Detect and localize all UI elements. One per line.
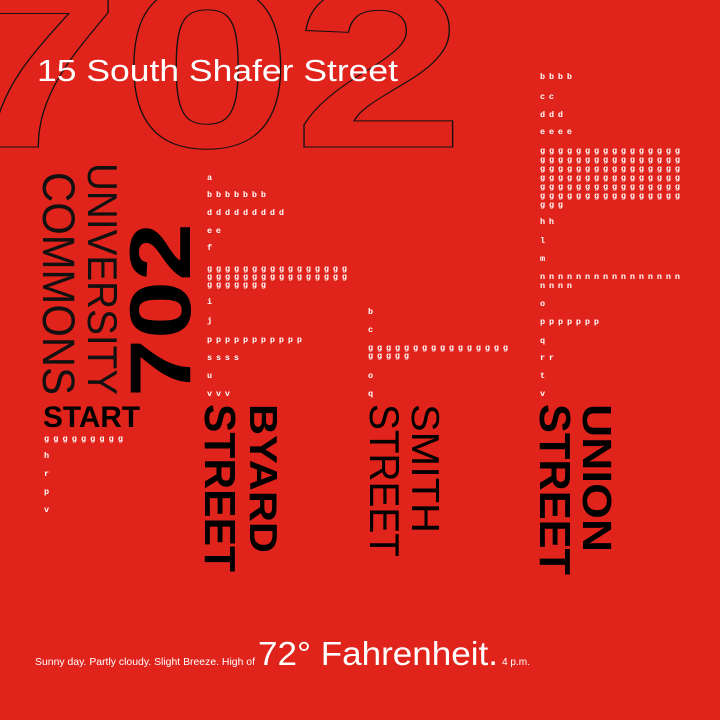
letter list: byard column: vvv [207,389,230,399]
letter list: union column: l [540,236,545,246]
letter list: union column: eeee [540,127,572,137]
letter list: byard column: ppppppppppp [207,335,302,345]
letter list: union column: t [540,371,545,381]
vertical street: Union Street [530,404,620,575]
letter list: smith column: q [368,389,373,399]
letter list: smith column: gggggggggggggggg [368,343,508,353]
letter list: union column: bbbb [540,72,572,82]
letter list: union column: rr [540,353,554,363]
letter list: union column: gggggggggggggggg [540,164,680,174]
letter list: byard column: ssss [207,353,239,363]
letter list: start [44,434,123,515]
letter list: byard column: u [207,371,212,381]
letter list: smith column [368,307,508,399]
letter list: union column: v [540,389,545,399]
weather footer: 72° Fahrenheit. [258,635,498,672]
vertical heading: University Commons: COMMONS [33,172,84,395]
letter list: union column: o [540,299,545,309]
letter list: byard column: gggggggggggggggg [207,264,347,274]
letter list: start: p [44,487,49,497]
vertical heading: University Commons: UNIVERSITY [79,163,126,395]
vertical street: Byard Street: STREET [195,404,244,572]
letter list: start: r [44,469,49,479]
letter list: byard column: a [207,173,212,183]
letter list: start: ggggggggg [44,434,123,444]
letter list: union column: ggg [540,200,563,210]
letter list: byard column: gggggggggggggggg [207,272,347,282]
letter list: union column [540,72,680,399]
letter list: union column: ddd [540,110,563,120]
letter list: smith column: ggggg [368,351,409,361]
title: address: 15 South Shafer Street [37,53,398,88]
letter list: start: h [44,451,49,461]
letter list: union column: gggggggggggggggg [540,155,680,165]
vertical street: Smith Street [361,404,446,557]
letter list: union column: gggggggggggggggg [540,182,680,192]
letter list: start: v [44,505,49,515]
letter list: union column: nnnn [540,281,572,291]
vertical street: Byard Street [195,404,284,572]
letter list: union column: q [540,336,545,346]
vertical street: Smith Street: STREET [361,404,408,557]
letter list: byard column [207,173,347,399]
letter list: smith column: c [368,325,373,335]
weather footer: 4 p.m. [502,656,530,668]
letter list: smith column: b [368,307,373,317]
letter list: byard column: ddddddddd [207,208,284,218]
letter list: byard column: ee [207,226,221,236]
vertical street: Union Street: UNION [574,404,620,552]
weather footer [35,635,530,672]
vertical bold number 702: 702 [113,223,209,397]
letter list: union column: gggggggggggggggg [540,173,680,183]
vertical street: Union Street: STREET [530,404,579,575]
vertical heading: University Commons [33,163,126,395]
weather footer: Sunny day. Partly cloudy. Slight Breeze. High of [35,656,255,668]
letter list: union column: cc [540,92,554,102]
letter list: smith column: o [368,371,373,381]
letter list: union column: nnnnnnnnnnnnnnnn [540,272,680,282]
letter list: byard column: ggggggg [207,280,266,290]
vertical street: Byard Street: BYARD [241,404,284,553]
letter list: union column: ppppppp [540,317,599,327]
letter list: union column: gggggggggggggggg [540,191,680,201]
letter list: byard column: i [207,297,212,307]
letter list: union column: gggggggggggggggg [540,146,680,156]
letter list: byard column: f [207,243,212,253]
letter list: byard column: bbbbbbb [207,190,266,200]
letter list: union column: m [540,254,545,264]
letter list: union column: hh [540,217,554,227]
START label: START [43,401,140,434]
vertical street: Smith Street: SMITH [403,404,446,533]
letter list: byard column: j [207,316,212,326]
